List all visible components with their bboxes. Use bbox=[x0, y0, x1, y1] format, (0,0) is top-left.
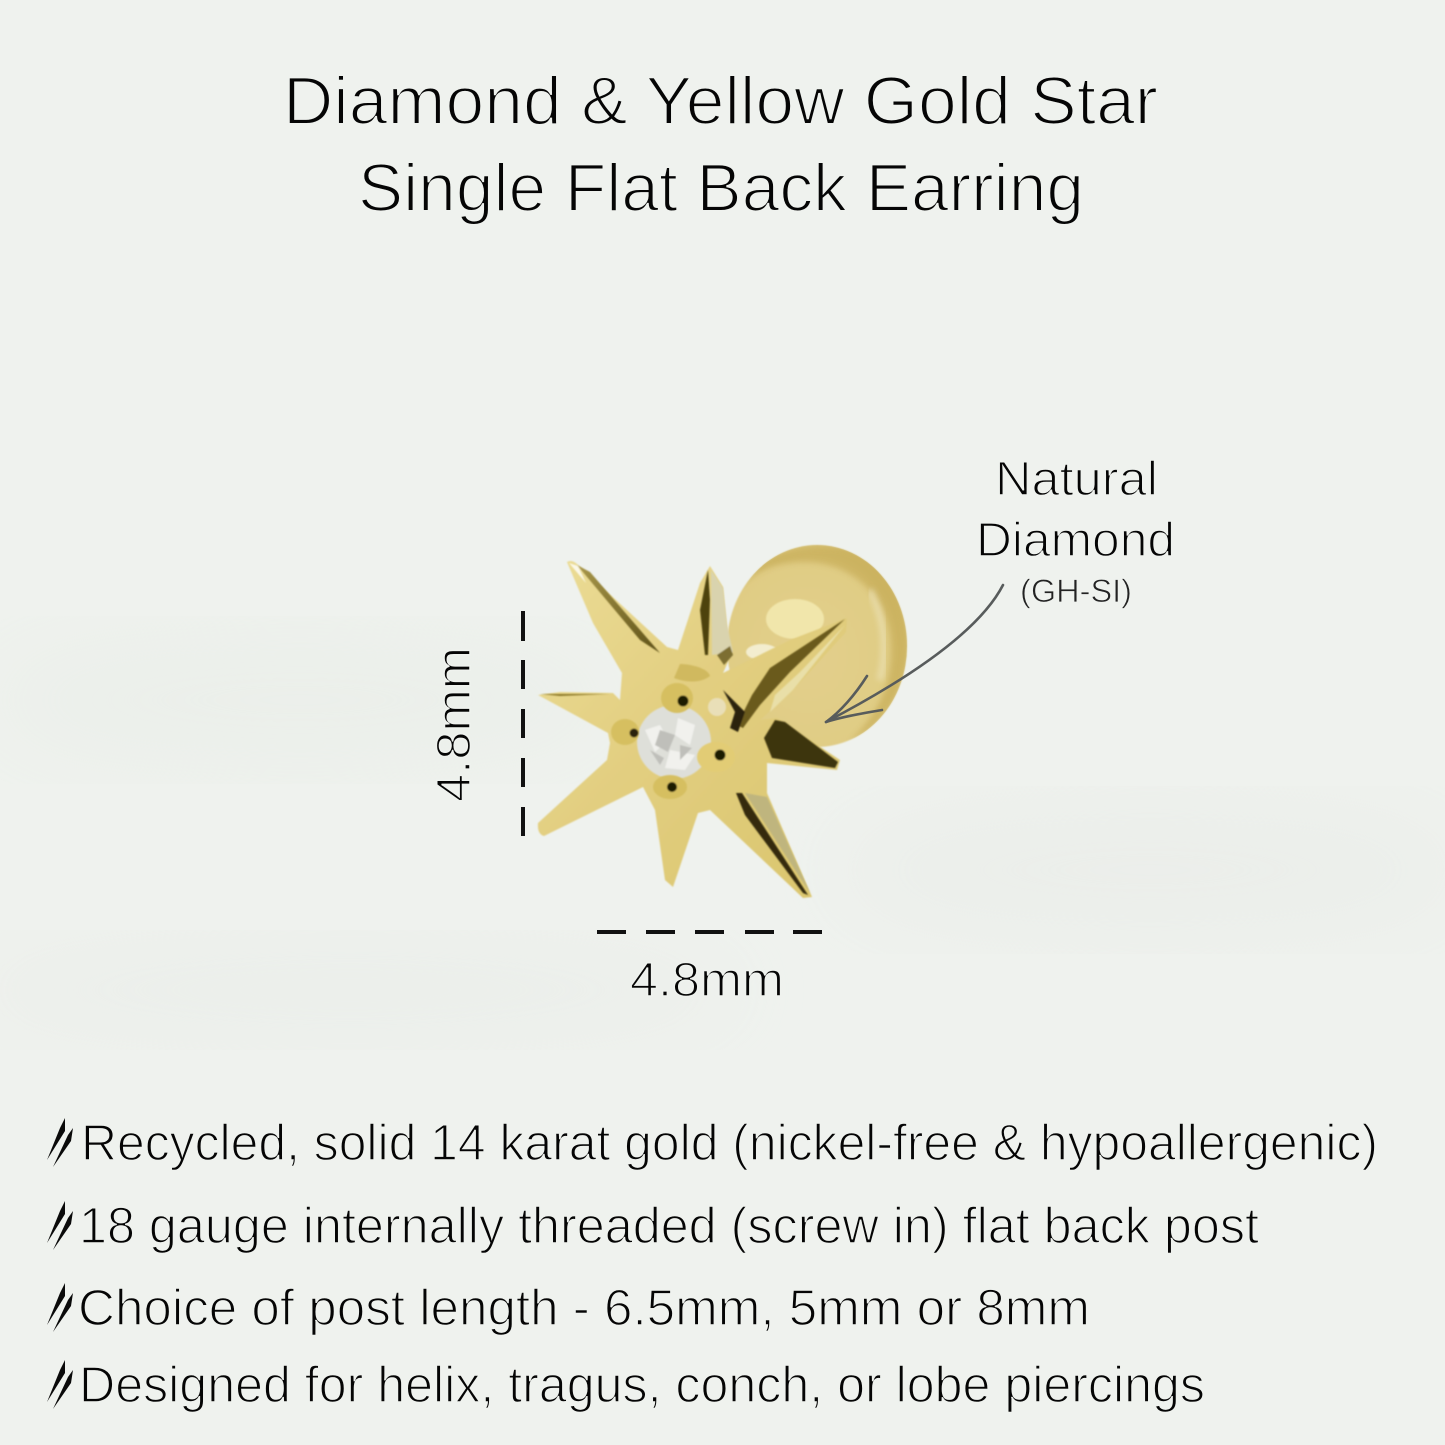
diamond bbox=[637, 705, 711, 779]
width label: 4.8mm bbox=[630, 954, 784, 1007]
bullet 3: Choice of post length - 6.5mm, 5mm or 8mm bbox=[78, 1279, 1090, 1336]
feature list bbox=[47, 1114, 1378, 1413]
bullet 1: Recycled, solid 14 karat gold (nickel-free & hypoallergenic) bbox=[81, 1114, 1378, 1171]
prongs bbox=[611, 683, 735, 799]
earring photo bbox=[538, 545, 907, 898]
title bbox=[283, 63, 1158, 226]
width dimension line bbox=[597, 930, 822, 934]
bullet 2: 18 gauge internally threaded (screw in) flat back post bbox=[79, 1197, 1259, 1254]
star facet highlights and shadows bbox=[540, 563, 845, 895]
height dimension line bbox=[521, 611, 525, 836]
star body bbox=[538, 561, 847, 898]
flat back disc bbox=[727, 545, 907, 747]
bullet 4: Designed for helix, tragus, conch, or lobe piercings bbox=[79, 1356, 1205, 1413]
height label: 4.8mm bbox=[428, 647, 481, 802]
title: Single Flat Back Earring bbox=[358, 150, 1084, 226]
diamond callout label bbox=[976, 453, 1175, 609]
diamond callout label: (GH-SI) bbox=[1020, 573, 1132, 609]
arrow to diamond bbox=[826, 585, 1003, 722]
title: Diamond & Yellow Gold Star bbox=[283, 63, 1158, 139]
diamond callout label: Natural bbox=[995, 453, 1158, 506]
diamond callout label: Diamond bbox=[976, 514, 1175, 567]
